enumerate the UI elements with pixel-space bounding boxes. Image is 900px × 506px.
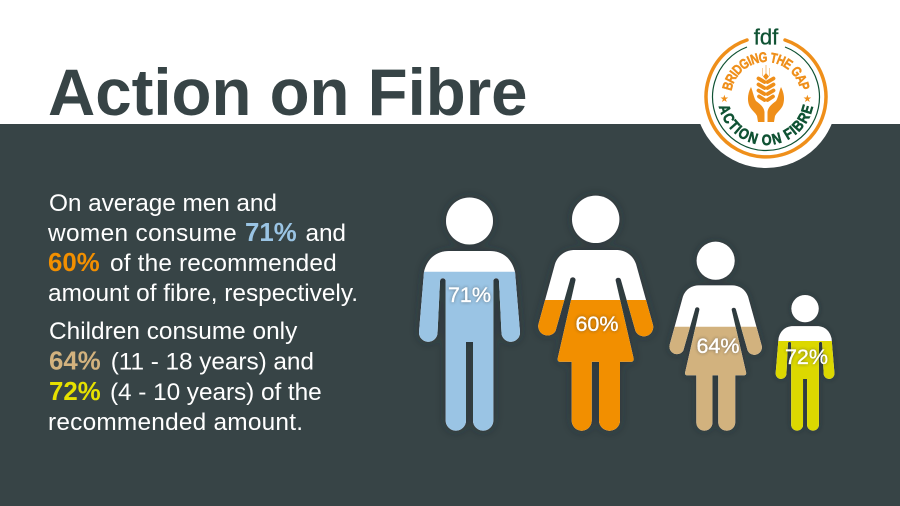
logo: bridging the gap: B — [720, 80, 737, 92]
logo: action on fibre: I — [786, 122, 800, 138]
label: 60%: 60% — [575, 312, 619, 336]
logo: bridging the gap — [720, 50, 812, 92]
logo: action on fibre — [716, 102, 816, 148]
logo: orange ring — [706, 40, 826, 157]
figure: man 71% — [419, 198, 520, 431]
logo: fdf wordmark: fdf — [754, 24, 779, 49]
intro text: children: (4 - 10 years) of the — [110, 379, 322, 406]
intro text: adults: and — [306, 220, 346, 247]
logo: action on fibre: N — [770, 129, 783, 148]
logo: action on fibre: E — [797, 103, 816, 116]
logo: action on fibre: O — [762, 131, 772, 148]
intro text: adults: of the recommended — [110, 250, 337, 277]
intro text: children: Children consume only — [49, 318, 298, 345]
logo: stars: ★ — [720, 94, 729, 105]
logo: hands — [748, 87, 784, 122]
intro text: children: (11 - 18 years) and — [111, 348, 314, 375]
background panel — [0, 124, 900, 506]
logo: stars — [720, 94, 812, 105]
intro text: children: recommended amount. — [48, 409, 303, 436]
intro text: children: 72% — [49, 378, 101, 406]
logo badge — [695, 24, 837, 168]
logo: bridging the gap: G — [736, 55, 752, 73]
figure: girl 64% — [669, 242, 762, 431]
logo: action on fibre: A — [716, 102, 735, 116]
logo: action on fibre: I — [731, 122, 745, 137]
figure: woman 60% — [538, 196, 653, 431]
logo: bridging the gap: G — [758, 50, 768, 66]
logo: bridging the gap: A — [792, 72, 810, 86]
logo: action on fibre: C — [719, 110, 739, 126]
label: 71%: 71% — [448, 283, 491, 307]
logo: bridging the gap: E — [781, 56, 795, 73]
logo: stars: ★ — [803, 94, 812, 105]
logo: bridging the gap: R — [722, 71, 740, 86]
logo: action on fibre: F — [780, 124, 796, 143]
intro text: adults: On average men and — [49, 190, 277, 217]
intro text: children: 64% — [49, 347, 101, 375]
logo: bridging the gap: P — [795, 80, 812, 92]
intro text: adults: 60% — [48, 249, 100, 277]
logo: action on fibre: O — [735, 124, 753, 144]
logo: bridging the gap: I — [727, 68, 741, 80]
title: Action on Fibre — [48, 56, 528, 129]
intro text: adults: women consume — [47, 220, 237, 247]
logo: bridging the gap: D — [729, 61, 746, 78]
logo: bridging the gap: N — [749, 51, 761, 68]
intro text: adults: 71% — [245, 219, 297, 247]
logo: wheat — [758, 65, 774, 100]
logo: action on fibre: B — [788, 116, 807, 135]
logo: green ring — [712, 47, 820, 151]
logo: bridging the gap: H — [774, 52, 788, 69]
logo: bridging the gap: G — [788, 64, 805, 80]
figure: child 72% — [776, 295, 834, 431]
logo: bridging the gap: I — [745, 54, 754, 69]
intro text: children — [48, 318, 322, 436]
logo: action on fibre: R — [793, 110, 813, 126]
logo: action on fibre: T — [725, 117, 743, 134]
logo: bridging the gap: T — [769, 50, 779, 67]
intro text: adults — [47, 190, 358, 307]
logo: action on fibre: N — [746, 128, 760, 147]
label: 72%: 72% — [785, 345, 828, 369]
intro text: adults: amount of fibre, respectively. — [48, 280, 358, 307]
label: 64%: 64% — [696, 334, 740, 358]
